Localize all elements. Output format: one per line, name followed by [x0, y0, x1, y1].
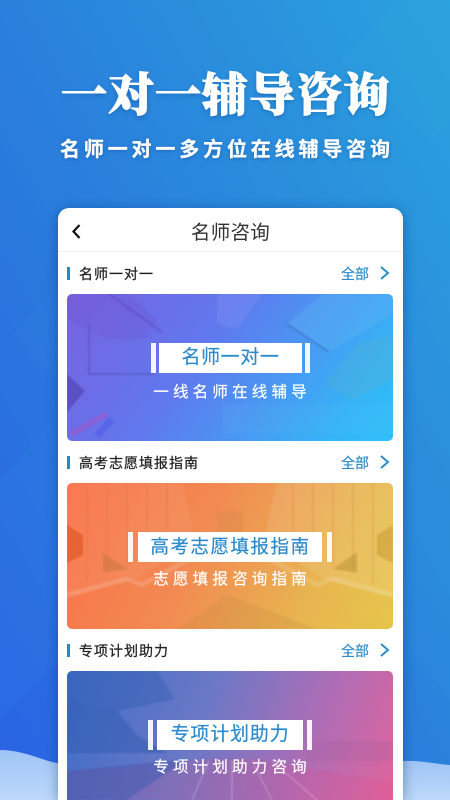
section header: 名师一对一: 全部 [341, 266, 369, 282]
section header: 高考志愿填报指南 [67, 455, 390, 471]
section header: 名师一对一 [67, 266, 390, 282]
banner: 专项计划助力 [67, 671, 393, 800]
right tick [305, 343, 310, 373]
label box: 高考志愿填报指南 [150, 536, 310, 557]
right tick [307, 720, 312, 750]
banner subtitle: 志愿填报咨询指南 [153, 571, 311, 588]
banner subtitle: 专项计划助力咨询 [153, 759, 311, 776]
back arrow icon [72, 224, 80, 239]
left tick [128, 532, 133, 562]
section header: 名师一对一: 名师一对一 [79, 266, 154, 282]
section header: 专项计划助力: 专项计划助力 [79, 643, 169, 659]
banner: 名师一对一 [67, 294, 393, 441]
label box [159, 343, 302, 373]
panel: phone screen card [58, 208, 403, 800]
banner: 高考志愿填报指南 [67, 483, 393, 629]
label box [157, 720, 303, 750]
right tick [327, 532, 332, 562]
banner subtitle: 一线名师在线辅导 [153, 384, 311, 401]
label box [138, 532, 322, 562]
photo hints: stadium and running track [67, 671, 393, 800]
section header: 专项计划助力 [67, 643, 390, 659]
label box: 名师一对一 [181, 347, 280, 368]
photo hints: building and stairs [67, 483, 393, 628]
section header: 高考志愿填报指南: 全部 [341, 455, 369, 471]
screen heading: 名师咨询 [191, 222, 270, 244]
left tick [148, 720, 153, 750]
title: 一对一辅导咨询 [61, 70, 390, 121]
left tick [151, 343, 156, 373]
subtitle: 名师一对一多方位在线辅导咨询 [60, 139, 394, 161]
label box: 专项计划助力 [171, 724, 289, 745]
section header: 专项计划助力: 全部 [341, 643, 369, 659]
section header: 高考志愿填报指南: 高考志愿填报指南 [79, 455, 199, 471]
photo hints: desk, hands, tablet [67, 294, 392, 438]
header divider [58, 251, 403, 252]
